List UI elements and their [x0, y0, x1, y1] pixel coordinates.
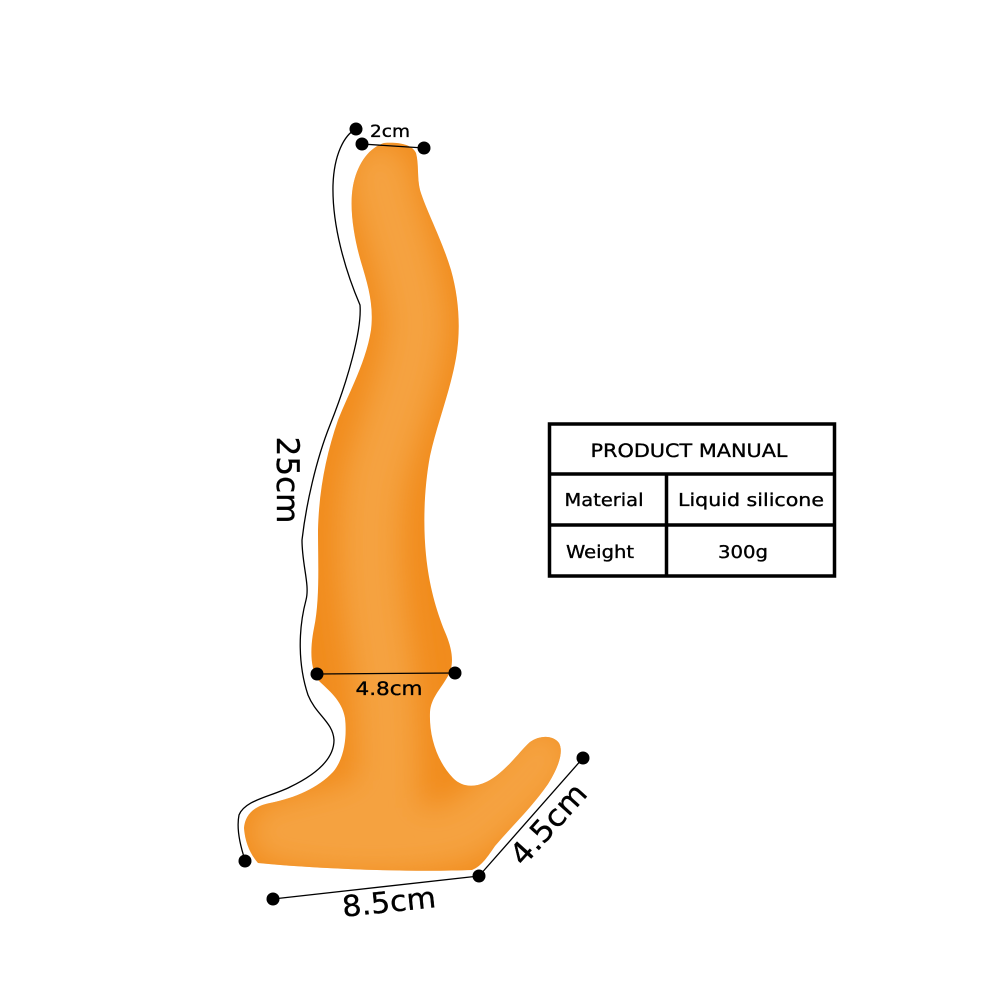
dimension: base length 8.5cm: 8.5cm — [340, 880, 437, 924]
dimension: base length 8.5cm — [266, 870, 486, 924]
dimension: neck width 4.8cm: 4.8cm — [356, 678, 422, 700]
dimension: tip width 2cm: 2cm — [370, 122, 410, 142]
dimension: total length 25cm — [238, 122, 362, 868]
material label: Material — [564, 490, 644, 511]
dimension: tip width 2cm — [356, 122, 430, 154]
material value: Liquid silicone — [678, 490, 824, 511]
table heading: PRODUCT MANUAL — [590, 440, 788, 462]
weight label: Weight — [566, 542, 634, 563]
dimension: base width 4.5cm — [479, 752, 595, 876]
dimension: neck width 4.8cm — [310, 666, 462, 700]
product silhouette — [244, 143, 561, 871]
dimension: base width 4.5cm: 4.5cm — [503, 777, 595, 873]
table: product manual — [549, 424, 835, 576]
weight value: 300g — [718, 542, 768, 563]
dimension: total length 25cm: 25cm — [269, 437, 305, 523]
